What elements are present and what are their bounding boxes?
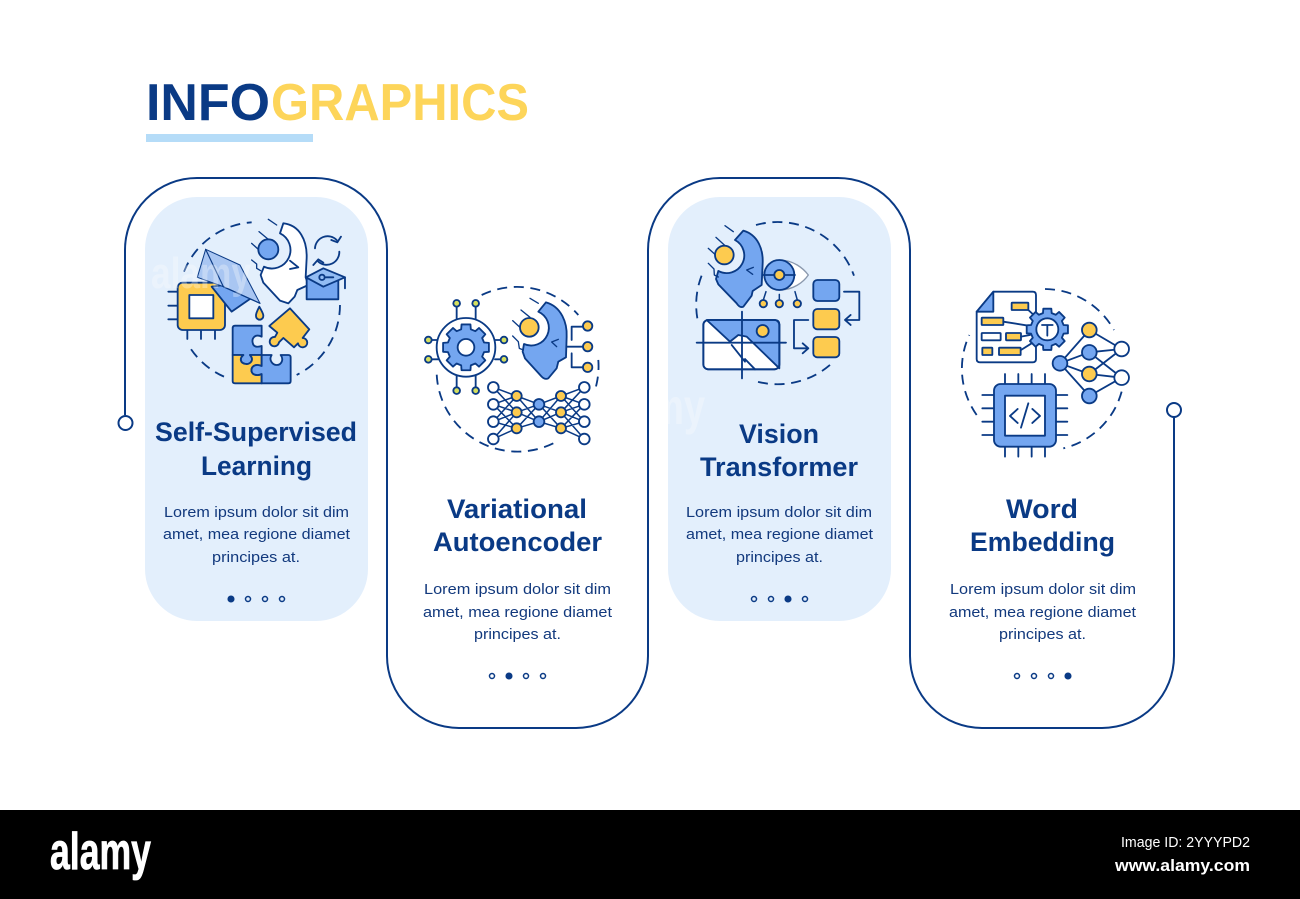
icon: vision transformer	[696, 222, 859, 384]
footer url: www.alamy.com	[1114, 856, 1250, 875]
title underline	[146, 134, 313, 142]
heading: Transformer	[700, 452, 858, 482]
pagination dots	[1014, 673, 1071, 679]
pagination dots	[228, 596, 284, 602]
heading: Self-Supervised	[155, 417, 357, 447]
card 1: Self-Supervised Learning	[155, 219, 357, 602]
heading	[155, 417, 357, 481]
title: INFOGRAPHICS: GRAPHICS	[271, 74, 529, 132]
faint stock watermark: alamy	[151, 249, 251, 298]
body text	[163, 504, 351, 566]
heading: Word	[1006, 494, 1078, 524]
faint stock watermark	[151, 249, 705, 435]
card 2: Variational Autoencoder	[423, 287, 613, 679]
continuous serpentine outline	[118, 178, 1181, 728]
body text	[423, 581, 613, 643]
heading	[433, 494, 602, 557]
heading: Autoencoder	[433, 527, 602, 557]
footer image id: Image ID: 2YYYPD2	[1121, 834, 1250, 851]
body text: Lorem ipsum dolor sit dim	[164, 504, 349, 521]
panel: shaded background card 1	[145, 197, 368, 621]
body text: principes at.	[474, 626, 561, 643]
body text: amet, mea regione diamet	[423, 604, 613, 621]
body text: amet, mea regione diamet	[949, 604, 1137, 621]
heading	[970, 494, 1115, 557]
body text	[686, 504, 874, 566]
icon: word embedding	[962, 289, 1129, 457]
body text: principes at.	[736, 549, 823, 566]
faint stock watermark: my	[650, 379, 705, 435]
title: INFOGRAPHICS: INFO	[146, 74, 270, 132]
body text: amet, mea regione diamet	[163, 526, 351, 543]
heading: Vision	[739, 419, 819, 449]
body text: amet, mea regione diamet	[686, 526, 874, 543]
heading	[700, 419, 858, 482]
heading: Learning	[201, 451, 312, 481]
body text	[949, 581, 1137, 643]
body text: principes at.	[999, 626, 1086, 643]
body text: principes at.	[212, 549, 300, 566]
body text: Lorem ipsum dolor sit dim	[686, 504, 872, 521]
pagination dots	[490, 673, 546, 679]
footer logo: alamy	[50, 823, 151, 881]
title: INFOGRAPHICS	[146, 74, 529, 132]
pagination dots	[752, 596, 808, 602]
icon: self-supervised learning	[168, 219, 345, 383]
panel: shaded background card 3	[668, 197, 891, 621]
card 3: Vision Transformer	[686, 222, 874, 602]
footer: stock photo bar	[0, 810, 1300, 899]
card 4: Word Embedding	[949, 289, 1137, 679]
body text: Lorem ipsum dolor sit dim	[424, 581, 611, 598]
body text: Lorem ipsum dolor sit dim	[950, 581, 1136, 598]
heading: Embedding	[970, 527, 1115, 557]
icon: variational autoencoder	[425, 287, 599, 452]
heading: Variational	[447, 494, 587, 524]
